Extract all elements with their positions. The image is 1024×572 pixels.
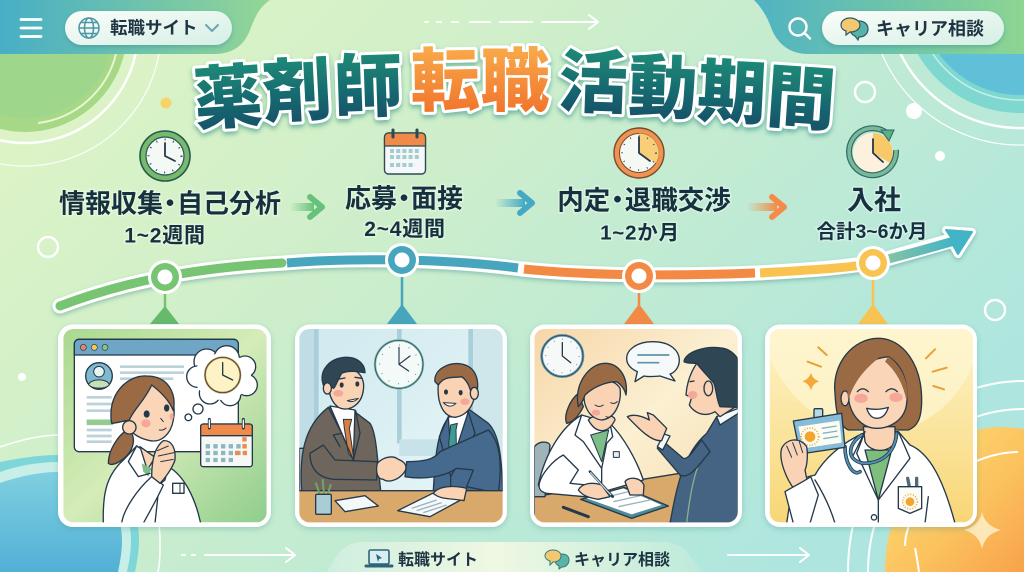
sparkle rays (802, 347, 947, 391)
chair (534, 442, 550, 497)
arrow: bottom left decorative (182, 548, 295, 562)
title: 間 (764, 59, 838, 140)
marker 3 (622, 259, 656, 324)
step label 4: 入社 (847, 186, 901, 216)
title: 職 (480, 43, 550, 120)
tab label: キャリア相談: キャリア相談 (574, 551, 670, 569)
pen on table (563, 507, 588, 517)
decorative circle: top left (0, 0, 161, 166)
icon: chat bubbles (841, 18, 868, 40)
header bar: left (0, 0, 270, 54)
arrow: bottom right decorative (728, 548, 809, 562)
step label 4: 合計3~6か月 (816, 220, 928, 243)
wall clock (375, 340, 423, 388)
table (534, 473, 687, 523)
panel: information gathering (58, 324, 271, 527)
step label 2: 応募・面接 (345, 184, 463, 214)
hand holding badge (781, 440, 818, 523)
document (398, 493, 461, 517)
hand on document (433, 487, 467, 501)
panel: application and interview (295, 324, 507, 527)
title: 期 (695, 53, 768, 134)
pharmacist thinking (103, 376, 201, 523)
arrow: step 2 to 3 (495, 193, 532, 213)
arrow: top decorative (425, 15, 598, 29)
lanyard (845, 433, 897, 473)
marker 1 (148, 260, 182, 324)
step label 3: 内定・退職交渉 (557, 186, 731, 216)
pharmacist signing (538, 363, 643, 497)
pharmacist smiling (787, 338, 955, 523)
icon: clock with return arrow step 4 (849, 128, 896, 175)
panel: offer and resignation negotiation (530, 324, 742, 527)
step label 1 (59, 188, 281, 248)
label: キャリア相談 (876, 19, 984, 39)
title: 薬 (191, 58, 265, 139)
advisor (627, 347, 738, 523)
notebook (335, 496, 378, 512)
thought bubble with clock (185, 346, 257, 421)
handshake (377, 457, 406, 481)
decorative dots and rings (18, 82, 1005, 381)
id badge (793, 409, 845, 454)
man right (405, 364, 503, 493)
marker 2 (385, 243, 419, 324)
icon: chevron (206, 25, 218, 31)
wall clock (542, 335, 583, 377)
arrow: step 3 to 4 (747, 197, 784, 217)
step label 4 (816, 186, 928, 243)
title: 剤 (261, 51, 334, 132)
speech bubble (627, 342, 679, 382)
icon: chat bubbles (545, 550, 569, 569)
icon: globe (79, 18, 99, 38)
table (298, 491, 505, 523)
browser window (74, 339, 238, 452)
title: 活 (557, 44, 629, 123)
title: 動 (627, 49, 699, 128)
icon: search (790, 18, 810, 38)
bottom navigation tabs (327, 542, 702, 572)
icon: clock step 3 (614, 128, 664, 178)
step label 2 (345, 184, 463, 241)
pocket with sun emblem (898, 478, 922, 513)
panel: joining the company (765, 324, 977, 527)
decorative circle: top right (870, 0, 1024, 145)
chair (299, 448, 304, 492)
pill: 転職サイト (65, 11, 232, 45)
pill: キャリア相談 (822, 11, 1004, 45)
header bar: right (754, 0, 1024, 54)
title: 転 (410, 42, 480, 121)
step label 1: 1~2週間 (124, 224, 206, 248)
icon: menu (21, 20, 41, 36)
icon: laptop (366, 550, 392, 566)
step label 2: 2~4週間 (364, 218, 446, 241)
step label 3 (557, 186, 731, 244)
window frame (299, 329, 503, 492)
step label 1: 情報収集・自己分析 (59, 188, 281, 218)
decorative shape: bottom right (848, 381, 1024, 572)
calendar (201, 419, 252, 467)
step label 3: 1~2か月 (600, 222, 680, 244)
label: 転職サイト (110, 18, 198, 38)
icon: clock step 1 (140, 131, 190, 181)
pen cup (316, 480, 331, 514)
clipboard (581, 487, 668, 518)
marker 4 (856, 246, 890, 324)
decorative shape: bottom left (0, 435, 160, 572)
icon: calendar step 2 (384, 130, 426, 174)
man left (301, 357, 381, 491)
timeline (60, 230, 972, 324)
title: 師 (332, 48, 404, 127)
arrow: step 1 to 2 (290, 197, 322, 217)
title (191, 42, 838, 140)
hands and pen (578, 472, 644, 499)
tab label: 転職サイト: 転職サイト (398, 551, 478, 569)
